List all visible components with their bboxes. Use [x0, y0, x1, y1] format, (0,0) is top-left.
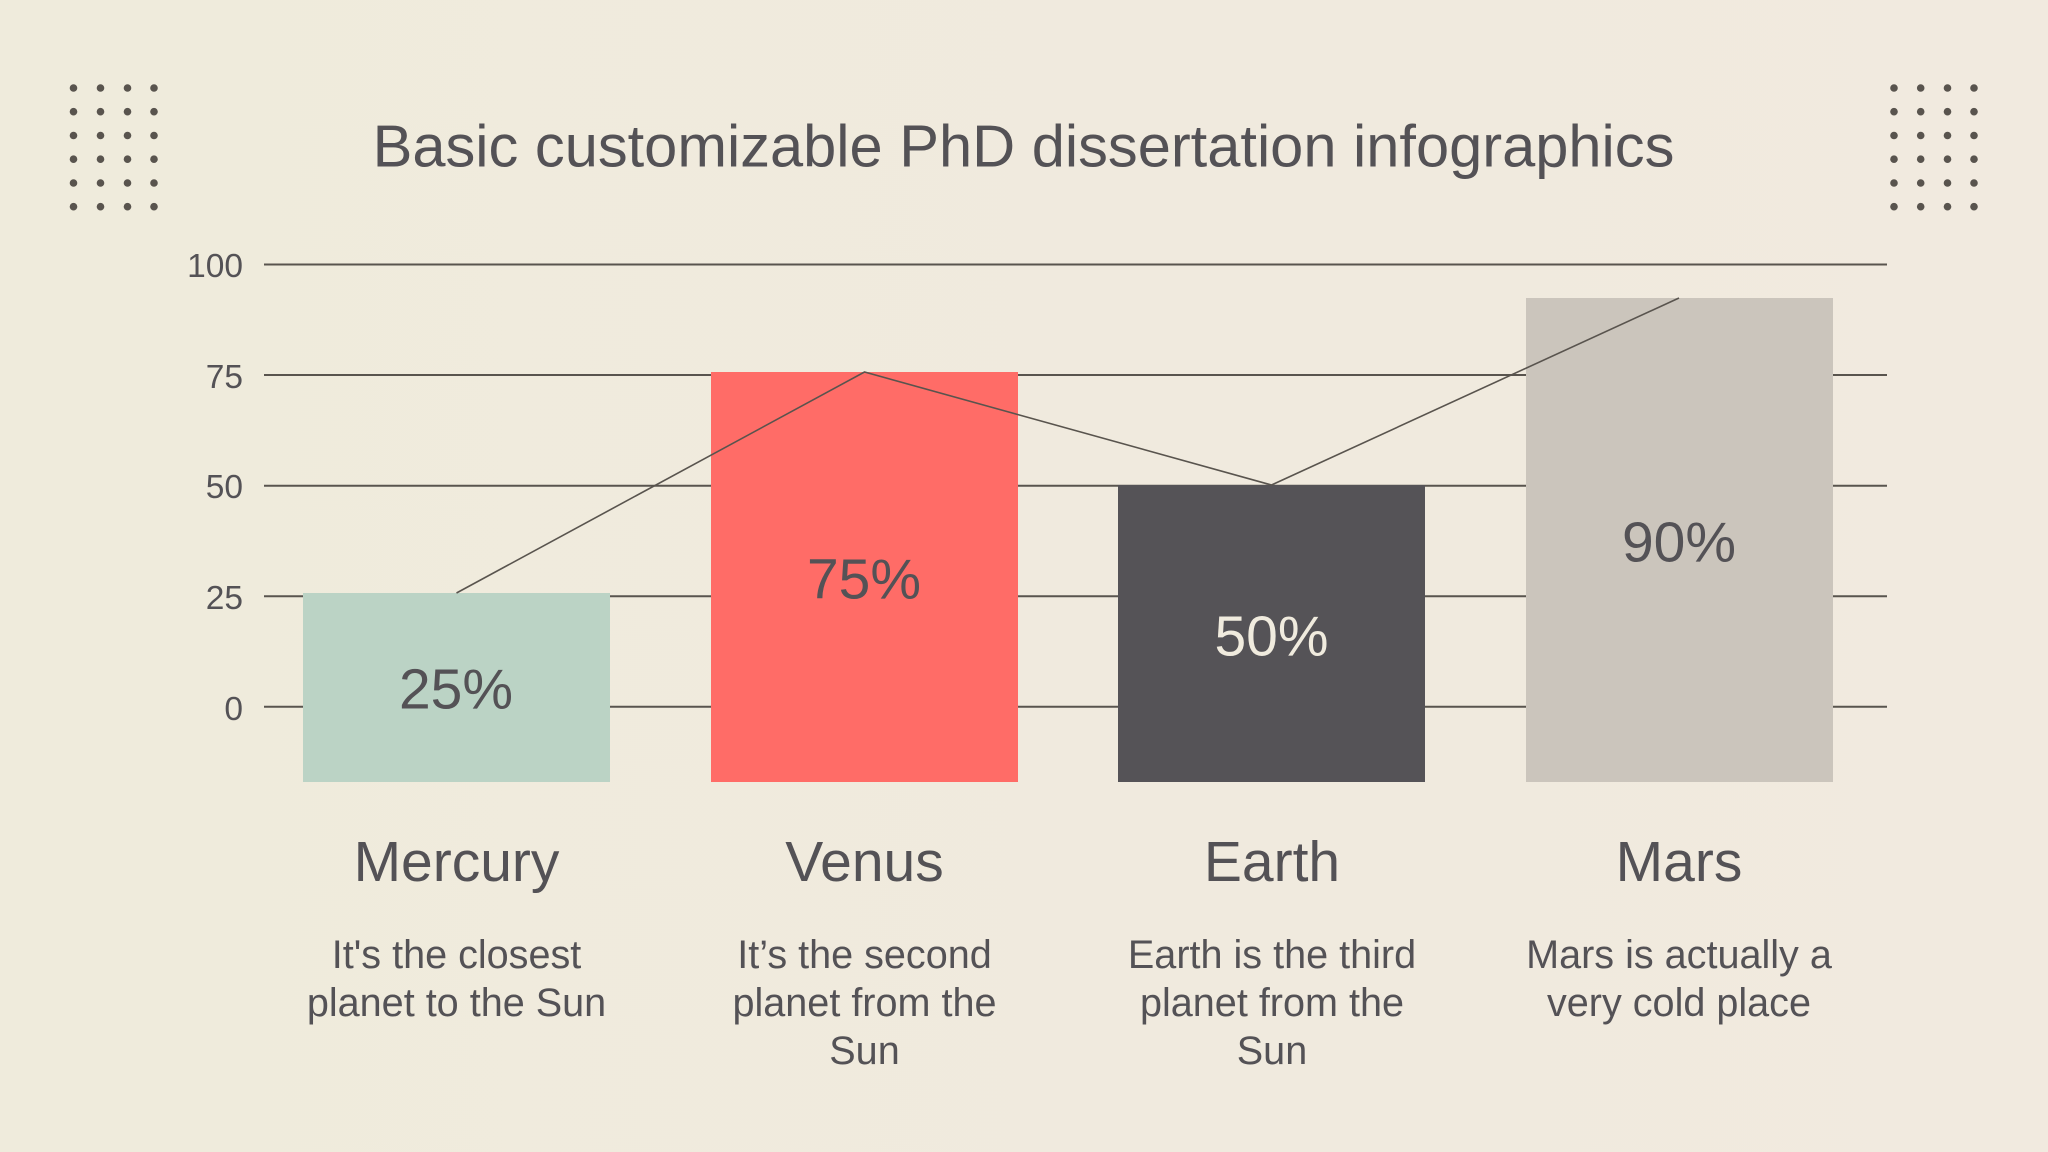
trend line	[456, 298, 1679, 593]
planet: Venus: It’s the second	[737, 933, 992, 977]
bar: Mercury	[303, 593, 610, 782]
title: Basic customizable PhD dissertation infographics	[373, 112, 1674, 180]
planet: Venus: Sun	[829, 1029, 900, 1073]
planet: Mercury: It's the closest	[332, 933, 581, 977]
grid lines	[264, 264, 1887, 707]
planet: Earth: Earth is the third	[1128, 933, 1416, 977]
planet: Earth: Earth	[1204, 830, 1340, 894]
value: 90%: 90%	[1622, 510, 1736, 574]
value: 25%: 25%	[399, 658, 513, 722]
planet: Mercury	[307, 830, 606, 1025]
bar: Venus	[711, 372, 1018, 782]
planet: Earth	[1128, 830, 1416, 1073]
y axis labels: 25	[206, 580, 243, 617]
planet: Mars: Mars is actually a	[1526, 933, 1833, 977]
bar: Mars	[1526, 298, 1833, 782]
y axis labels: 100	[187, 248, 243, 285]
icon: dot grid right	[1890, 84, 1978, 210]
planet: Earth: Sun	[1237, 1029, 1307, 1073]
y axis labels: 0	[224, 691, 243, 728]
icon: dot grid left	[70, 84, 158, 210]
planet: Mercury: planet to the Sun	[307, 981, 606, 1025]
y axis labels	[187, 248, 243, 728]
value: 50%: 50%	[1214, 604, 1329, 668]
planet: Venus: planet from the	[732, 981, 997, 1025]
planet: Venus: Venus	[785, 830, 944, 894]
planet: Mars: very cold place	[1547, 981, 1811, 1025]
planet: Mercury: Mercury	[354, 830, 560, 894]
y axis labels: 50	[206, 469, 243, 506]
chart: combined bars and line	[187, 248, 1887, 782]
planet: Mars	[1526, 830, 1833, 1025]
y axis labels: 75	[206, 359, 243, 396]
planet: Earth: planet from the	[1140, 981, 1404, 1025]
value: 75%: 75%	[807, 548, 921, 612]
planet: Venus	[732, 830, 997, 1073]
bar: Earth	[1118, 485, 1425, 782]
planet: Mars: Mars	[1616, 830, 1742, 894]
